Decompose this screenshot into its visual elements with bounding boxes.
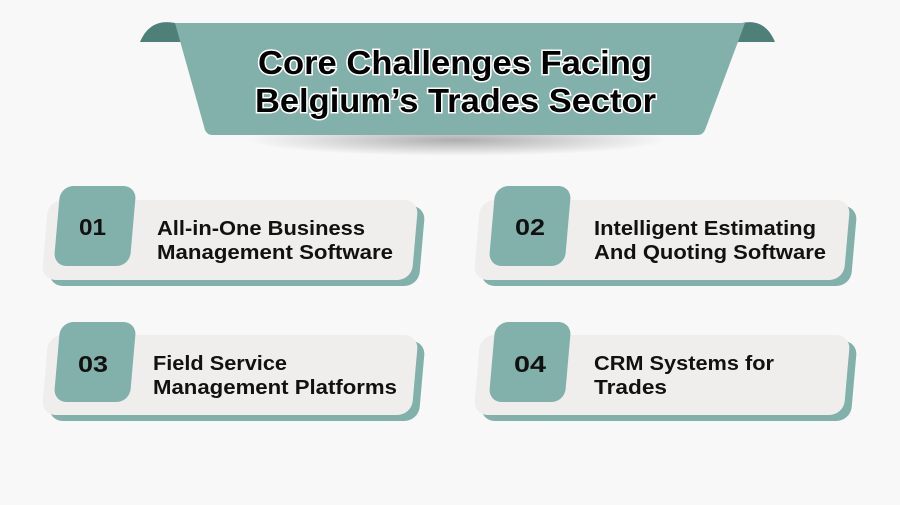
- title text: [255, 44, 656, 119]
- card 03: [42, 322, 425, 421]
- card 02: And Quoting Software: [594, 242, 826, 264]
- title text: Core Challenges Facing: [258, 44, 652, 81]
- card 01: [42, 186, 425, 286]
- card 03: Management Platforms: [153, 377, 397, 399]
- card 02: 02: [515, 214, 545, 240]
- card 02: Intelligent Estimating: [594, 218, 816, 240]
- title banner: [140, 22, 775, 156]
- card 01: All-in-One Business: [157, 218, 365, 240]
- title text: Belgium’s Trades Sector: [255, 82, 656, 119]
- card 01: Management Software: [157, 242, 393, 264]
- card 04: Trades: [594, 377, 667, 399]
- card 04: [474, 322, 857, 421]
- card 04: CRM Systems for: [594, 353, 774, 375]
- card 03: 03: [78, 351, 108, 377]
- card 01: 01: [79, 214, 106, 240]
- card 03: Field Service: [153, 353, 287, 375]
- card 02: [474, 186, 857, 286]
- card 04: 04: [514, 351, 546, 377]
